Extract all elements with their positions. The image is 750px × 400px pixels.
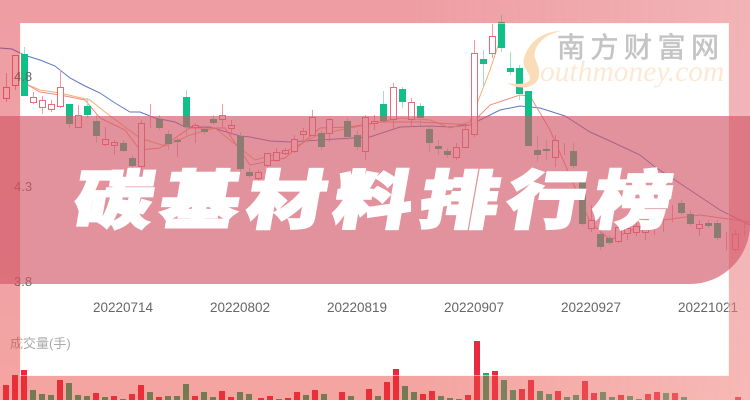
axis labels: 3.8 [14, 274, 32, 289]
axis labels: 20220819 [327, 300, 387, 315]
volume bars [3, 341, 741, 400]
axis labels: 20220907 [444, 300, 504, 315]
axis labels: 4.8 [14, 69, 32, 84]
axis labels: 20220714 [93, 300, 154, 315]
hollow red candle bodies [4, 36, 738, 250]
candlestick wicks [6, 15, 744, 252]
logo: 南方财富网 southmoney.com: 南方财富网 [557, 32, 725, 63]
axis labels: 成交量(手) [10, 336, 71, 351]
title: 碳基材料排行榜 [69, 165, 687, 237]
axis labels: 20221021 [678, 300, 738, 315]
axis labels: 20220927 [561, 300, 621, 315]
logo: 南方财富网 southmoney.com: outhmoney.com [540, 56, 724, 88]
axis labels [10, 69, 738, 351]
translucent title band [0, 116, 750, 284]
solid green candle bodies [21, 22, 721, 247]
moving average lines [0, 40, 750, 240]
logo: 南方财富网 southmoney.com [507, 31, 725, 88]
axis labels: 4.3 [14, 179, 32, 194]
axis labels: 20220802 [210, 300, 270, 315]
